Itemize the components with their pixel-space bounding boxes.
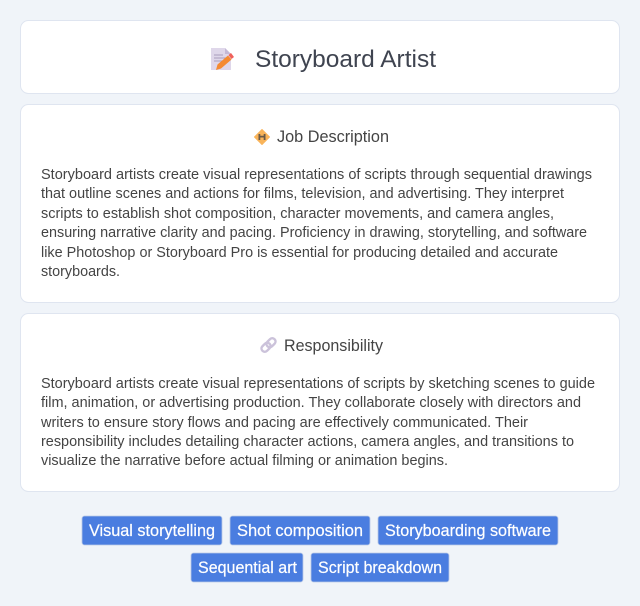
text block: job description [41,167,592,280]
tag: Visual storytelling [82,516,222,545]
tag: Visual storytelling: Visual storytelling [89,522,215,540]
text block: job description: storyboards. [41,264,120,280]
panel: responsibility [20,314,620,492]
text block: responsibility: Storyboard artists create visual representations of scripts by sketching scenes to guide [41,376,595,392]
text block: responsibility: writers to ensure story flows and pacing are effectively communicated. Their [40,415,528,431]
text block: job description: Storyboard artists create visual representations of scripts through sequential drawings [41,167,592,183]
heading: responsibility: Responsibility [284,337,384,355]
tag: Script breakdown [311,553,449,582]
text block: responsibility: responsibility includes detailing character actions, camera angles, and transitions to [41,434,574,450]
tag: Script breakdown: Script breakdown [318,559,442,577]
icon: chain link [260,337,277,353]
tag: Storyboarding software [378,516,558,545]
heading: job description: Job Description [277,128,389,146]
text block: responsibility [40,376,595,469]
title: Storyboard Artist [255,46,436,73]
tag: Shot composition: Shot composition [237,522,363,540]
panel: job description [20,104,620,302]
text block: job description: ensuring narrative clarity and pacing. Proficiency in drawing, storytelling, and software [41,225,587,241]
icon: diamond sign [254,130,270,144]
text block: job description: that outline scenes and actions for films, television, and advertising. They interpret [41,186,564,202]
text block: job description: scripts to establish shot composition, character movements, and camera angles, [41,206,554,222]
text block: job description: like Photoshop or Storyboard Pro is essential for producing detailed and accurate [41,245,558,261]
text block: responsibility: film, animation, or advertising production. They collaborate closely with directors and [41,395,581,411]
tag: Shot composition [230,516,370,545]
panel: title card [20,20,620,94]
tag: Storyboarding software: Storyboarding software [385,522,551,540]
text block: responsibility: visualize the narrative before actual filming or animation begins. [41,453,448,469]
tag: Sequential art [191,553,303,582]
icon: document with pencil [211,48,234,70]
tag: Sequential art: Sequential art [198,559,297,577]
